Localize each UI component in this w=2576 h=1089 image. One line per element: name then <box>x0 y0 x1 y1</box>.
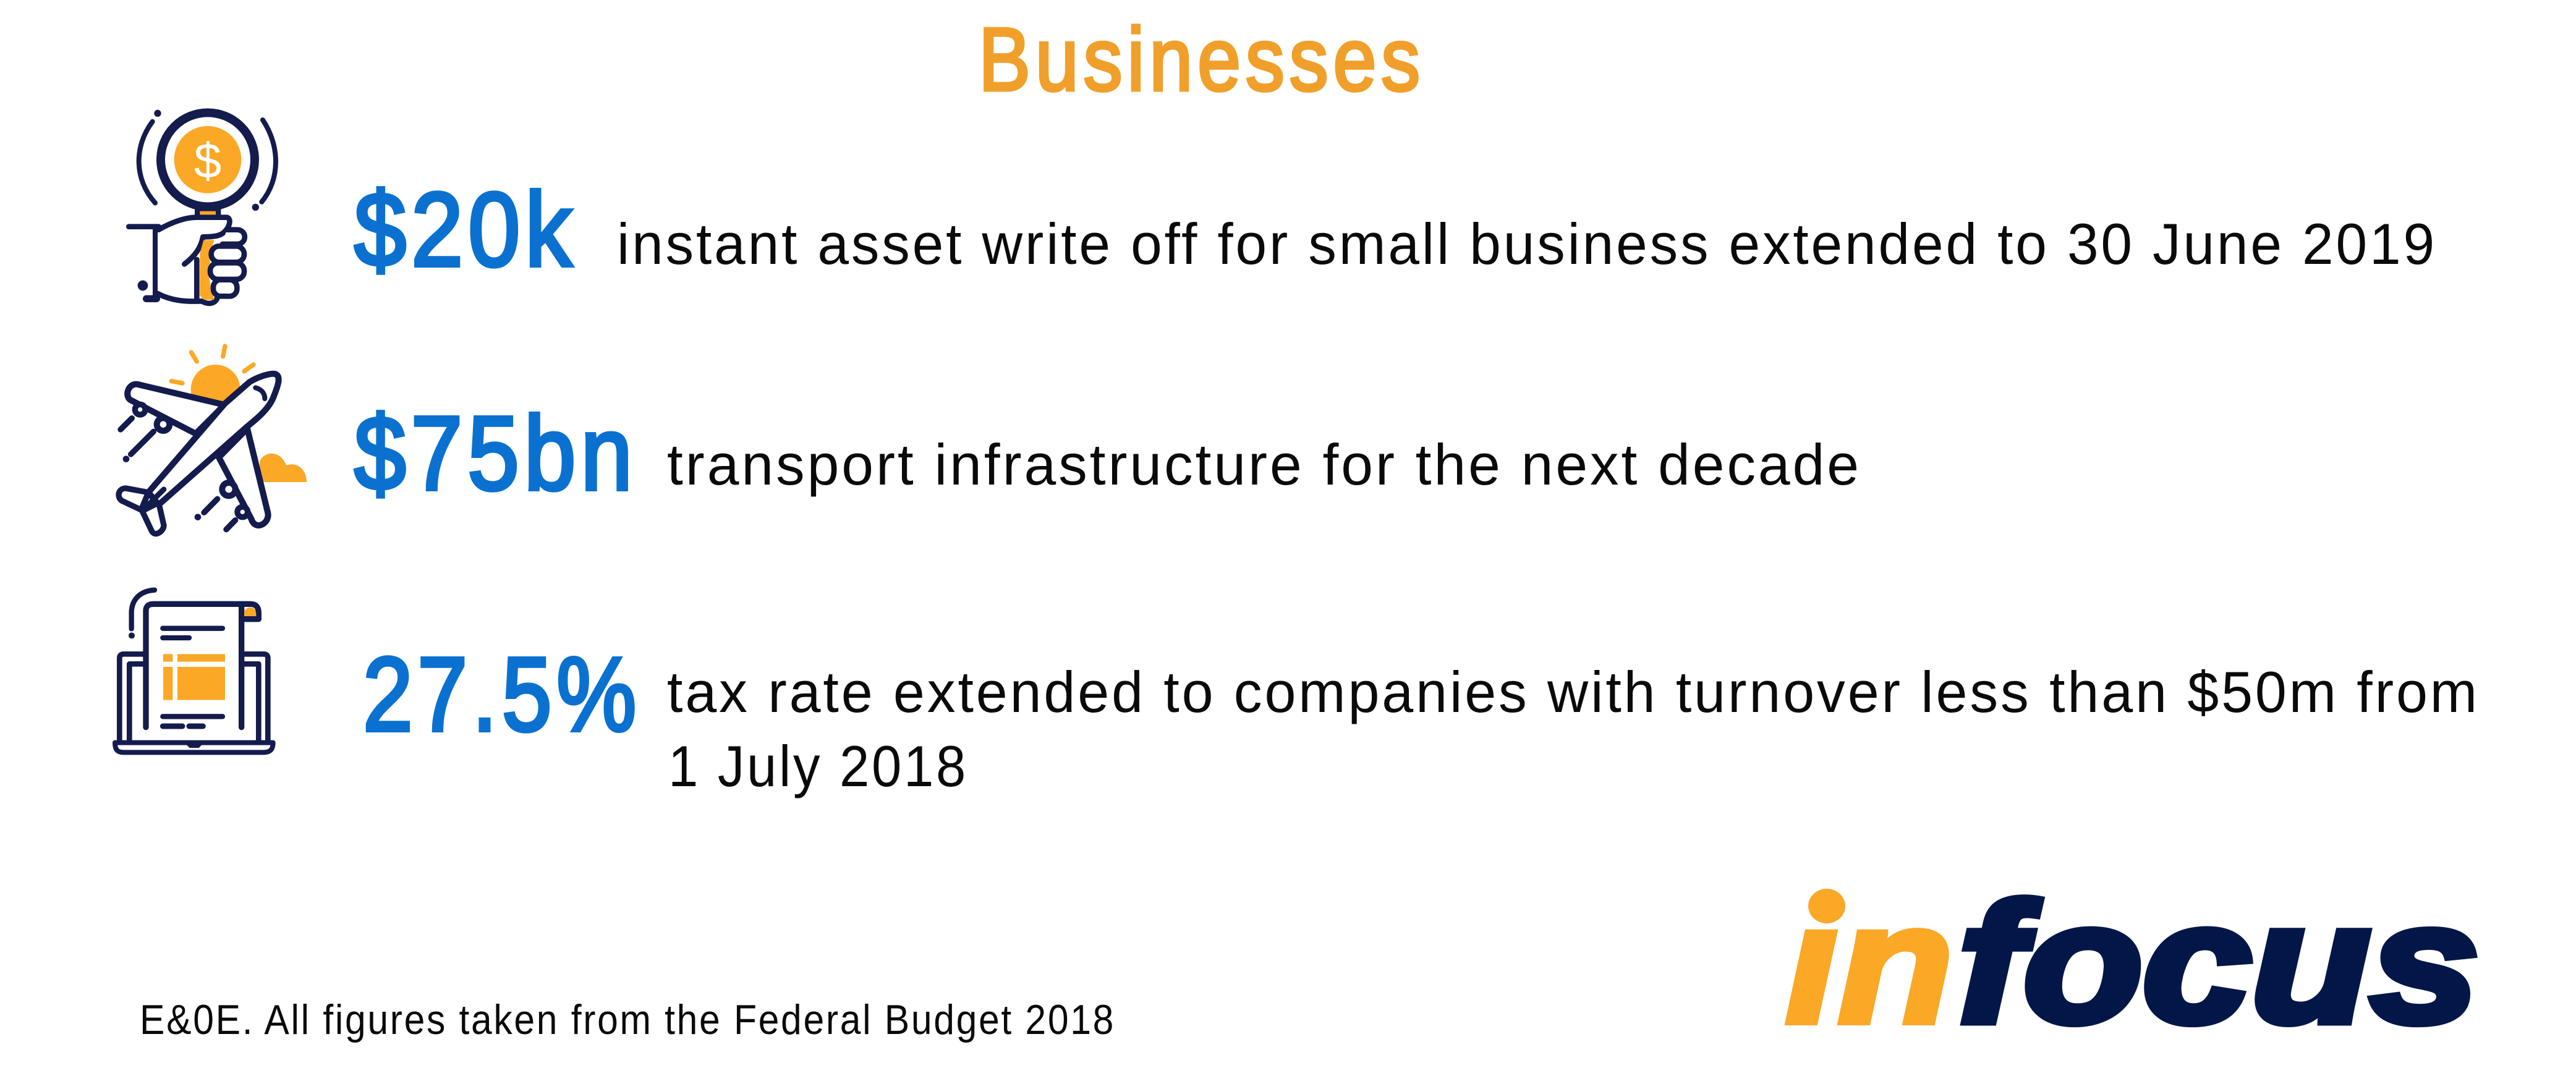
icon: plane with sun and cloud <box>119 346 307 534</box>
logo: infocus: ın <box>1785 869 1953 1059</box>
text: transport infrastructure: transport infrastructure for the next decade <box>667 432 1861 497</box>
title: Businesses <box>979 9 1425 109</box>
text: instant asset write off: instant asset write off for small business extended to 30 June 2019 <box>617 211 2437 276</box>
icon: hand holding magnifying glass with dollar coin: $ <box>194 133 221 188</box>
icon: laptop with document <box>115 590 273 752</box>
text: tax rate extended <box>667 659 2480 799</box>
text: tax rate extended: tax rate extended to companies with turnover less than $50m from <box>667 659 2480 724</box>
footnote: E&0E. All figures taken from the Federal Budget 2018 <box>140 996 1115 1043</box>
icon: hand holding magnifying glass with dollar coin <box>129 110 276 303</box>
logo: infocus <box>1785 868 2479 1059</box>
stat: 27.5%: 27.5% <box>363 636 641 753</box>
logo: infocus: focus <box>1958 868 2479 1058</box>
text: tax rate extended: 1 July 2018 <box>668 734 968 799</box>
stat: $20k: $20k <box>354 171 577 289</box>
stat: $75bn: $75bn <box>354 395 637 512</box>
